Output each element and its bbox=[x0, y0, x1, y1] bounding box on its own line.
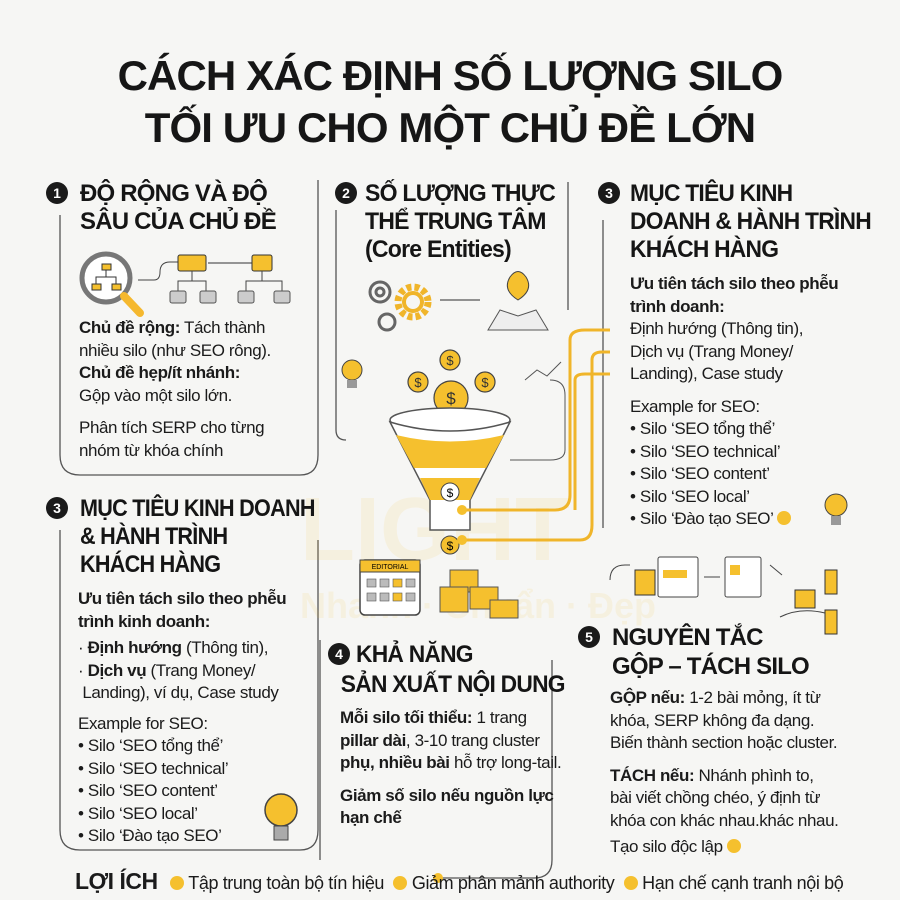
funnel bbox=[390, 408, 510, 432]
panel 2: core entities bbox=[335, 179, 556, 263]
number 2: 2 bbox=[342, 185, 350, 201]
watermark: LIGHT bbox=[300, 480, 570, 580]
text block 3 left: • Silo ‘SEO tổng thể’ bbox=[78, 736, 223, 755]
text block 3 left: • Silo ‘SEO technical’ bbox=[78, 758, 228, 778]
icon: lightbulb bbox=[824, 494, 848, 525]
text block 4: phụ, nhiều bài hỗ trợ long-tail. Giảm số silo nếu nguồn lực bbox=[340, 753, 561, 804]
text block 5: GỘP nếu: 1-2 bài mỏng, ít từ bbox=[610, 688, 821, 707]
heading 1: ĐỘ RỘNG VÀ ĐỘ bbox=[80, 180, 267, 207]
text block 3: Định hướng (Thông tin), bbox=[630, 319, 803, 338]
coins: $ bbox=[481, 375, 489, 390]
lightbulb bbox=[342, 360, 362, 380]
illustration: gears, map, funnel with coins: $ bbox=[447, 539, 454, 553]
text block 1: Gộp vào một silo lớn. Phân tích SERP cho từng bbox=[79, 386, 264, 437]
text block 5 bbox=[610, 688, 838, 856]
footer: benefits: LỢI ÍCH Tập trung toàn bộ tín hiệu Giảm phân mảnh authority Hạn chế cạnh tranh nội bộ bbox=[75, 868, 843, 894]
illustration: gears, map, funnel with coins bbox=[342, 271, 610, 554]
text block 4 bbox=[340, 708, 561, 827]
text block 5: khóa, SERP không đa dạng. bbox=[610, 710, 814, 730]
text block 3: • Silo ‘SEO tổng thể’ bbox=[630, 419, 775, 438]
number 2 bbox=[335, 182, 357, 204]
text block 5: Biến thành section hoặc cluster. TÁCH nếu: Nhánh phình to, bbox=[610, 733, 837, 784]
heading 4: SẢN XUẤT NỘI DUNG bbox=[341, 671, 565, 698]
panel 3 left: business goals bbox=[46, 494, 315, 845]
text block 3: • Silo ‘SEO local’ bbox=[630, 486, 750, 506]
text block 3 bbox=[630, 274, 838, 528]
icon: editorial calendar and boxes bbox=[359, 559, 518, 618]
panel 1: breadth and depth bbox=[46, 179, 290, 460]
text block 3: • Silo ‘SEO content’ bbox=[630, 464, 770, 483]
text block 3: • Silo ‘SEO technical’ bbox=[630, 442, 780, 460]
number 3: 3 bbox=[605, 185, 613, 201]
icon: hands exchanging documents bbox=[610, 556, 838, 634]
heading 3 left bbox=[80, 494, 315, 578]
heading 2: THỂ TRUNG TÂM bbox=[365, 208, 546, 235]
number 1 bbox=[46, 182, 68, 204]
icon: lightbulb left bbox=[264, 793, 298, 840]
heading 4: KHẢ NĂNG bbox=[356, 641, 473, 668]
title bbox=[118, 52, 782, 151]
text block 3 left: · Dịch vụ (Trang Money/ bbox=[78, 660, 255, 680]
title: TỐI ƯU CHO MỘT CHỦ ĐỀ LỚN bbox=[145, 104, 755, 151]
text block 3: Dịch vụ (Trang Money/ bbox=[630, 342, 793, 360]
text block 4: pillar dài, 3-10 trang cluster bbox=[340, 730, 540, 750]
text block 3: • Silo ‘Đào tạo SEO’ bbox=[630, 509, 773, 528]
icon: magnifier with tree bbox=[80, 252, 290, 317]
heading 3: DOANH & HÀNH TRÌNH bbox=[630, 208, 871, 235]
text block 3: trình doanh: bbox=[630, 296, 724, 316]
heading 3: MỤC TIÊU KINH bbox=[630, 180, 792, 207]
text block 3 left: Ưu tiên tách silo theo phễu bbox=[78, 589, 286, 608]
heading 5 bbox=[612, 623, 809, 680]
panel 4: content production capacity bbox=[328, 640, 565, 827]
heading 3 left: KHÁCH HÀNG bbox=[80, 551, 220, 578]
text block 3 left: • Silo ‘SEO local’ bbox=[78, 804, 198, 822]
heading 2: SỐ LƯỢNG THỰC bbox=[365, 180, 555, 207]
heading 2 bbox=[365, 179, 556, 263]
text block 3 left bbox=[78, 589, 286, 845]
illustration: gears, map, funnel with coins: $ bbox=[447, 486, 454, 500]
number 3 left: 3 bbox=[53, 500, 61, 516]
text block 1: Chủ đề rộng: Tách thành bbox=[79, 318, 265, 337]
text block 3 left: Landing), ví dụ, Case study Example for SEO: bbox=[78, 683, 278, 732]
text block 1: nhiều silo (như SEO rông). bbox=[79, 340, 271, 360]
coins: $ bbox=[446, 353, 454, 368]
text block 1: nhóm từ khóa chính bbox=[79, 440, 223, 460]
heading 2: (Core Entities) bbox=[365, 236, 511, 263]
text block 3 left: trình kinh doanh: · Định hướng (Thông tin), bbox=[78, 612, 268, 657]
heading 5: NGUYÊN TẮC bbox=[612, 624, 763, 651]
number 4: 4 bbox=[335, 646, 343, 662]
text block 3: Landing), Case study Example for SEO: bbox=[630, 364, 783, 416]
icon: editorial calendar and boxes: EDITORIAL bbox=[372, 564, 409, 571]
heading 1 bbox=[80, 179, 276, 235]
number 5 bbox=[578, 626, 600, 648]
text block 3 left: • Silo ‘Đào tạo SEO’ bbox=[78, 826, 221, 845]
watermark: Nhanh · Chuẩn · Đẹp bbox=[300, 585, 656, 626]
text block 3 left: • Silo ‘SEO content’ bbox=[78, 781, 218, 800]
panel 3 right: business goals bbox=[598, 179, 871, 528]
heading 4 bbox=[341, 640, 565, 698]
heading 3 left: & HÀNH TRÌNH bbox=[80, 523, 227, 550]
number 3 bbox=[598, 182, 620, 204]
text block 3: Ưu tiên tách silo theo phễu bbox=[630, 274, 838, 293]
number 4 bbox=[328, 643, 350, 665]
text block 4: Mỗi silo tối thiểu: 1 trang bbox=[340, 708, 527, 727]
number 1: 1 bbox=[53, 185, 61, 201]
text block 5: khóa con khác nhau.khác nhau. Tạo silo độc lập bbox=[610, 810, 838, 856]
text block 5: bài viết chồng chéo, ý định từ bbox=[610, 788, 820, 807]
panel 5: merge/split rule bbox=[578, 623, 838, 856]
heading 1: SÂU CỦA CHỦ ĐỀ bbox=[80, 208, 276, 235]
watermark bbox=[300, 480, 656, 626]
title: CÁCH XÁC ĐỊNH SỐ LƯỢNG SILO bbox=[118, 52, 782, 99]
heading 3: KHÁCH HÀNG bbox=[630, 236, 778, 263]
coins: $ bbox=[414, 375, 422, 390]
coins: $ bbox=[446, 389, 456, 408]
number 3 left bbox=[46, 497, 68, 519]
text block 4: hạn chế bbox=[340, 808, 401, 827]
text block 1: Chủ đề hẹp/ít nhánh: bbox=[79, 363, 240, 382]
heading 3 left: MỤC TIÊU KINH DOANH bbox=[80, 495, 315, 522]
heading 3 bbox=[630, 179, 871, 263]
heading 5: GỘP – TÁCH SILO bbox=[612, 653, 809, 680]
text block 1 bbox=[79, 318, 271, 460]
connector lines to section 3 bbox=[462, 330, 618, 540]
coins bbox=[408, 350, 495, 415]
number 5: 5 bbox=[585, 629, 593, 645]
